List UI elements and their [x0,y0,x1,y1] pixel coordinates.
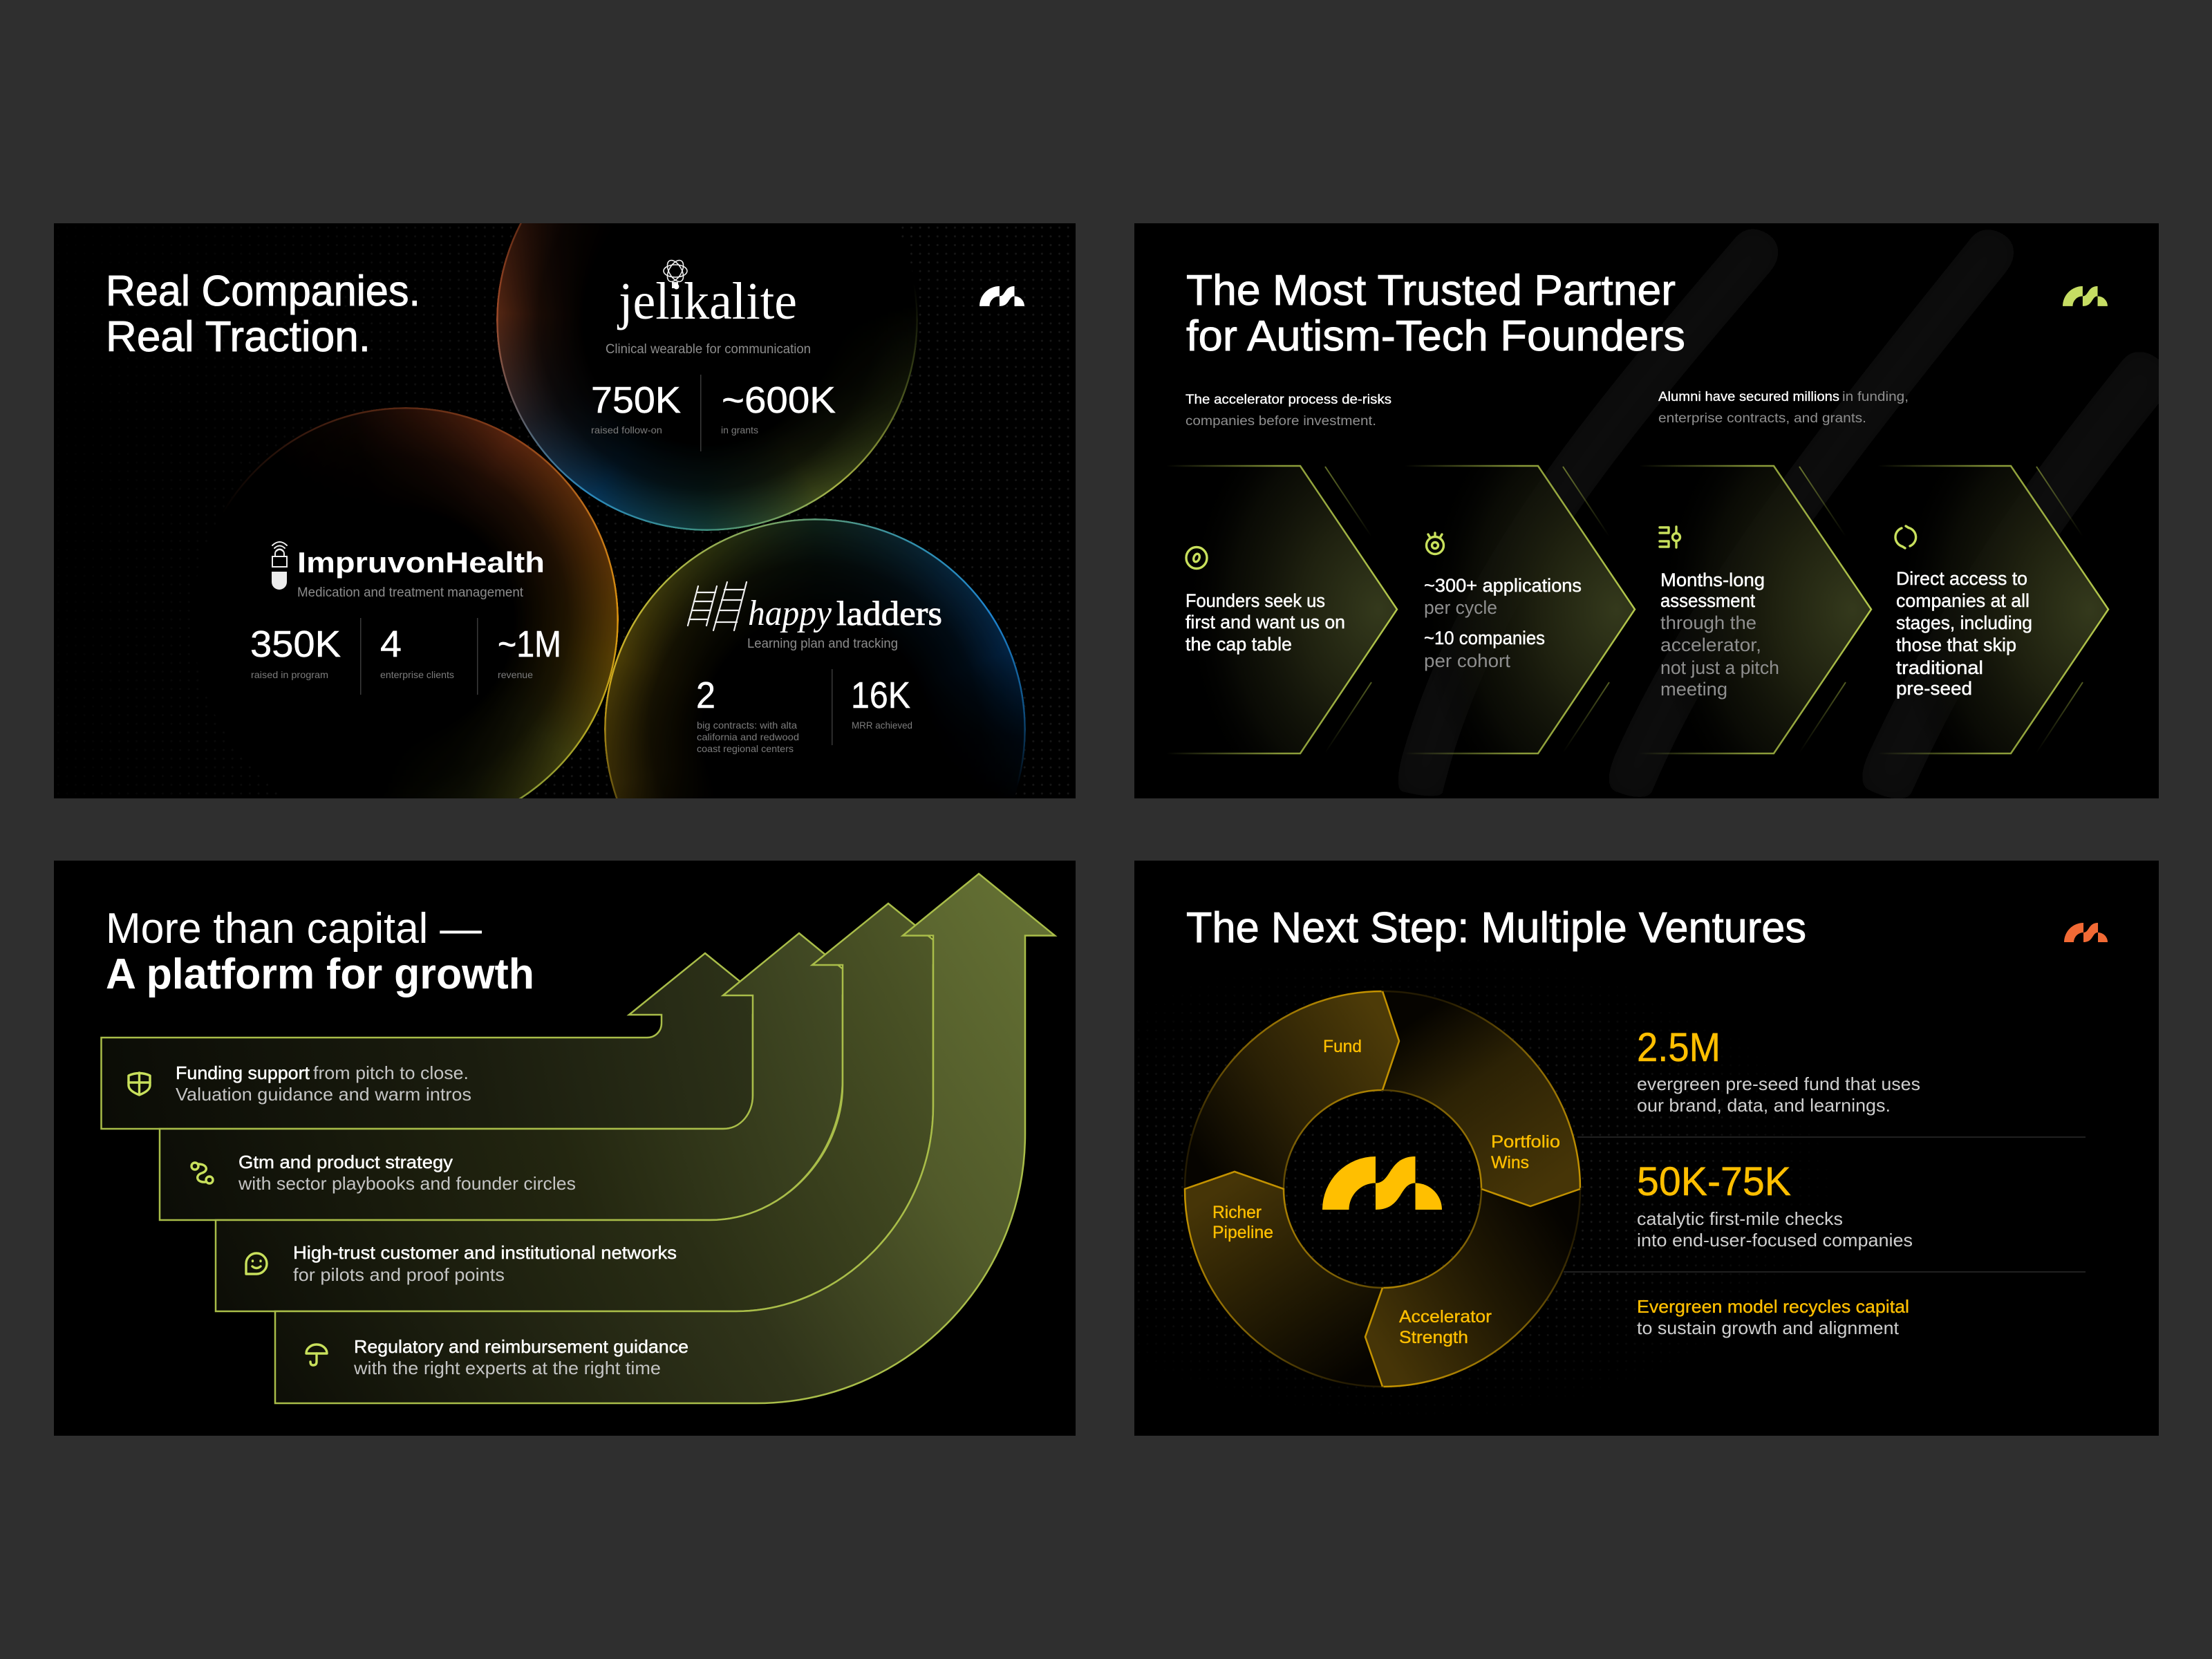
arrow 4 text [353,1336,688,1378]
happyladders stats: big contracts: with alta [697,720,797,731]
arrow 1 text: Funding support [176,1062,310,1083]
happyladders description: Learning plan and tracking [747,637,898,651]
jelikalite stats: raised follow-on [591,424,662,435]
segment: Portfolio Wins [1382,991,1580,1206]
ImpruvonHealth stats: 350K [250,624,341,665]
title: Real Companies. [106,268,420,315]
step 1 text [1185,590,1345,655]
step 2 text: ~10 companies [1424,628,1545,648]
step 1 text: first and want us on [1185,612,1345,632]
panel: most trusted partner [1134,223,2159,798]
happyladders stats: coast regional centers [697,743,794,754]
arrow 2 text [238,1152,576,1194]
intro text: process: The accelerator process de-risks [1185,393,1391,407]
step 3 text: meeting [1660,679,1727,700]
ImpruvonHealth stats [250,618,561,695]
chevron step 2 [1405,466,1635,753]
ImpruvonHealth description: Medication and treatment management [297,585,524,600]
jelikalite stats [591,375,836,451]
callout: evergreen model [1637,1296,1909,1338]
step 3 text [1660,570,1779,700]
intro text: alumni: Alumni have secured millions [1658,390,1839,404]
ImpruvonHealth wordmark: ImpruvonHealth [297,546,545,579]
stat: check size: into end-user-focused companies [1637,1230,1913,1250]
jelikalite wordmark: jelikalite [617,272,797,330]
step 3 text: through the [1660,612,1756,633]
chevron step 4 [1877,466,2108,753]
title [106,268,420,361]
segment: Accelerator Strength: Strength [1399,1328,1468,1347]
segment: Portfolio Wins: Portfolio [1491,1132,1560,1152]
arrow 3 text [293,1242,677,1285]
jelikalite stats: in grants [721,424,758,435]
callout: evergreen model: to sustain growth and alignment [1637,1318,1900,1338]
step 4 text [1896,568,2032,699]
title: Real Traction. [106,313,371,361]
arrow 1: funding [101,953,781,1129]
step 2 text: per cohort [1424,650,1511,671]
happyladders wordmark [688,582,942,633]
happyladders stats: 2 [696,675,715,716]
panel: platform for growth [54,861,1076,1436]
happyladders wordmark: happy [748,594,832,633]
segment: Portfolio Wins: Wins [1491,1153,1529,1172]
arrow 4 text: with the right experts at the right time [353,1358,661,1378]
happyladders stats: 16K [851,675,910,716]
ImpruvonHealth stats: 4 [380,624,402,665]
arrow 1 text: Valuation guidance and warm intros [176,1084,471,1105]
title: for Autism-Tech Founders [1186,312,1685,360]
title: The Next Step: Multiple Ventures [1186,904,1806,952]
step 3 text: not just a pitch [1660,657,1779,678]
icon: route [191,1163,213,1183]
icon: brand logo [980,286,1024,306]
icon: shield [129,1073,150,1095]
ImpruvonHealth stats: revenue [498,669,533,680]
intro text: process [1185,393,1391,429]
step 2 text: per cycle [1424,597,1497,618]
panel: real companies, real traction [54,223,1076,798]
chevron step 3 [1639,466,1871,753]
icon: center logo [1322,1156,1442,1210]
title: More than capital — [106,905,482,953]
step 1 text: the cap table [1185,634,1292,655]
icon: brand logo [2063,286,2108,306]
title [106,905,534,998]
icon: brand logo [2064,923,2108,942]
title: The Most Trusted Partner [1186,267,1676,315]
happyladders wordmark: ladders [836,594,942,632]
arrow 2: strategy [160,933,875,1220]
step 3 text: accelerator, [1660,635,1761,655]
bubble: jelikalite [496,223,918,531]
segment: Fund: Fund [1323,1037,1362,1056]
step 3 text: assessment [1660,590,1755,611]
icon: target [1186,547,1207,568]
callout: evergreen model: Evergreen model recycles capital [1637,1296,1909,1317]
icon: smile bubble [246,1253,267,1274]
slide content: real traction [106,260,1024,754]
jelikalite description: Clinical wearable for communication [606,342,811,357]
jelikalite stats: 750K [591,379,681,421]
arrow 1 text: from pitch to close. [313,1062,469,1083]
segment: Richer Pipeline: Pipeline [1212,1223,1273,1242]
arrow 4 text: Regulatory and reimbursement guidance [354,1336,688,1357]
chevron step 1 [1166,466,1397,753]
icon: sliders [1660,527,1680,547]
happyladders stats: california and redwood [697,731,799,742]
panel: next step multiple ventures [1134,861,2159,1436]
step 4 text: pre-seed [1896,678,1972,699]
jelikalite stats: ~600K [722,379,836,421]
stat: check size [1637,1159,1913,1250]
ImpruvonHealth stats: ~1M [498,624,561,665]
stat: fund size: evergreen pre-seed fund that uses [1637,1074,1920,1094]
title: A platform for growth [106,950,534,998]
intro text: process: companies before investment. [1185,414,1376,429]
ImpruvonHealth stats: enterprise clients [380,669,454,680]
arrow 3 text: for pilots and proof points [293,1264,505,1285]
intro text: alumni [1658,390,1909,426]
arrow 1 text [176,1062,471,1105]
step 3 text: Months-long [1660,570,1765,590]
intro text: alumni: enterprise contracts, and grants. [1658,411,1866,426]
arrow 4: regulatory [275,874,1055,1403]
step 4 text: companies at all [1896,590,2030,611]
step 2 text [1424,575,1582,671]
stat: fund size: 2.5M [1637,1025,1721,1070]
step 4 text: stages, including [1896,612,2032,633]
icon: refresh [1895,526,1916,548]
step 4 text: Direct access to [1896,568,2027,589]
stat: fund size: our brand, data, and learnings. [1637,1095,1891,1116]
segment: Richer Pipeline: Richer [1212,1203,1262,1222]
icon: eye [1427,533,1443,554]
ImpruvonHealth wordmark [272,542,545,590]
segment: Accelerator Strength [1365,1189,1580,1387]
step 2 text: ~300+ applications [1424,575,1582,596]
segment: Accelerator Strength: Accelerator [1399,1307,1492,1327]
arrow 2 text: Gtm and product strategy [238,1152,453,1172]
step 1 text: Founders seek us [1185,590,1325,611]
cycle diagram [1185,991,1580,1387]
arrow 3: networks [216,903,964,1311]
bubble: ImpruvonHealth [206,407,619,798]
arrow 2 text: with sector playbooks and founder circles [238,1173,576,1194]
step 4 text: traditional [1896,657,1983,678]
happyladders stats: MRR achieved [852,720,912,731]
ImpruvonHealth stats: raised in program [251,669,328,680]
icon: umbrella [306,1344,327,1365]
arrow 3 text: High-trust customer and institutional networks [293,1242,677,1263]
step 4 text: those that skip [1896,635,2016,655]
intro text: alumni: in funding, [1842,390,1909,404]
stat: check size: 50K-75K [1637,1159,1791,1204]
bubble: happyladders [604,518,1026,798]
segment: Fund [1185,991,1399,1189]
stat: fund size [1637,1025,1920,1116]
segment: Richer Pipeline [1185,1172,1382,1387]
stat: check size: catalytic first-mile checks [1637,1208,1843,1229]
title [1186,267,1685,360]
happyladders stats [696,669,912,754]
